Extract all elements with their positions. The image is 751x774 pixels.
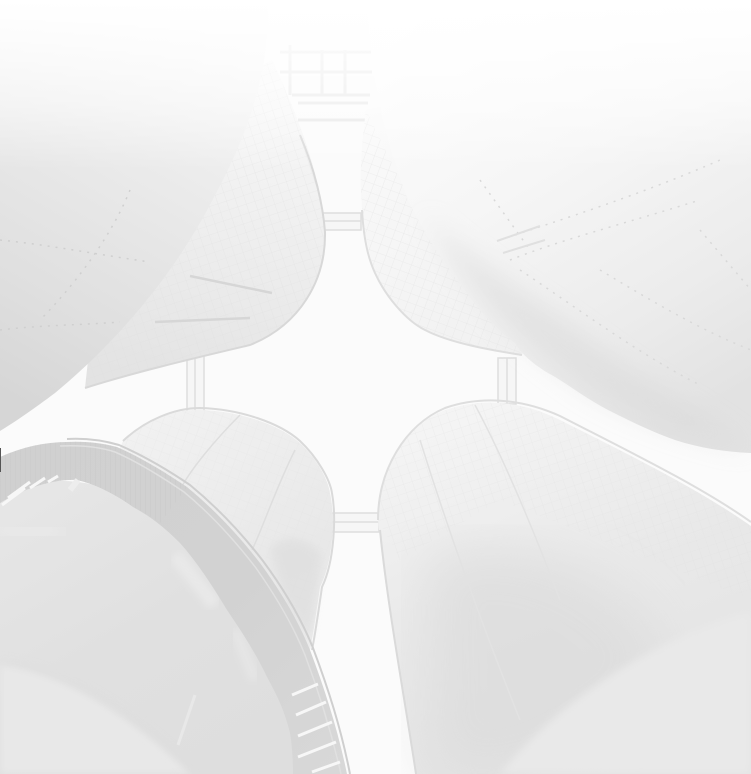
- silo: bottom right: [378, 400, 751, 774]
- left edge artifact: [0, 448, 1, 472]
- silo: top right front: [368, 0, 751, 453]
- silo: bottom left rear: [110, 408, 334, 720]
- silo: bottom left front: [0, 481, 300, 774]
- silo: top right rear: [361, 100, 560, 355]
- scaffold at top centre: [280, 45, 372, 120]
- top white fade overlay: [0, 0, 751, 170]
- spiral staircase: [0, 439, 350, 774]
- silo: top left rear: [85, 60, 325, 388]
- silo: top left front: [0, 0, 268, 431]
- connector bridges between silos: [187, 213, 516, 532]
